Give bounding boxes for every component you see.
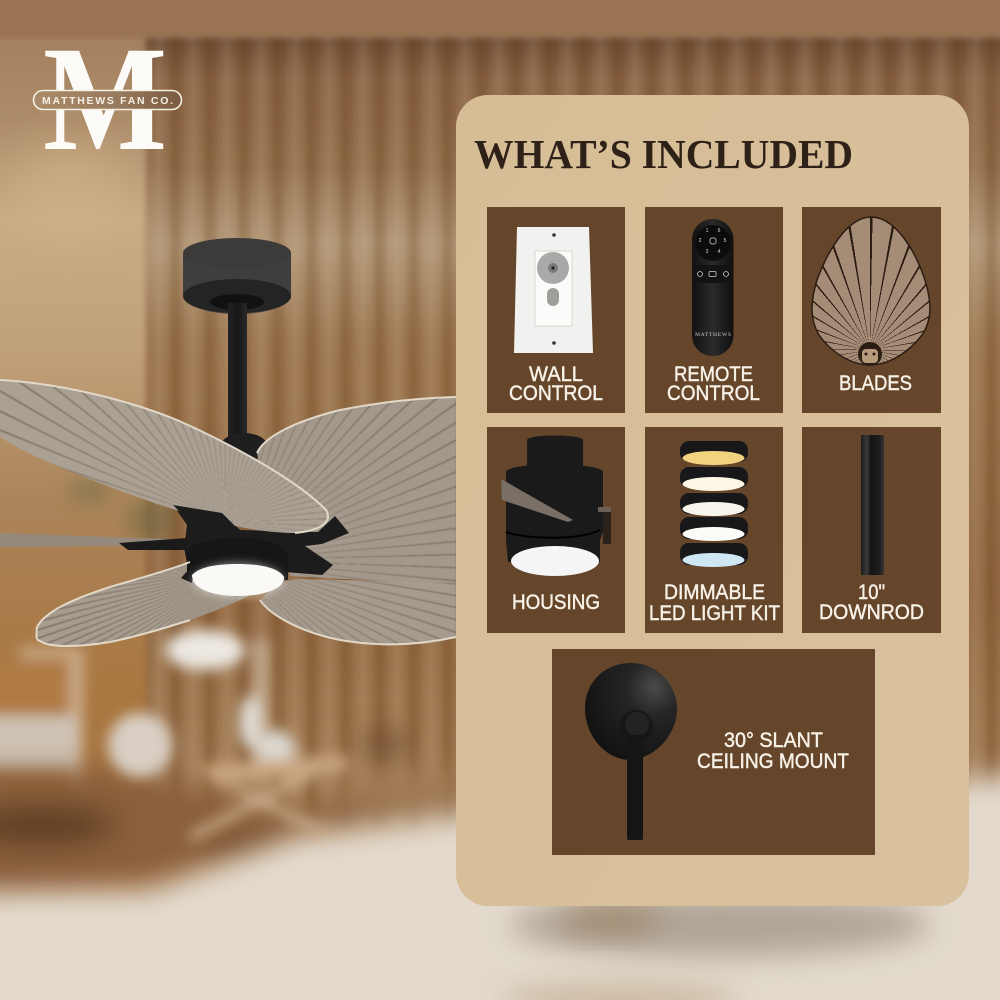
fan blade: upper right [255, 396, 456, 591]
icon: wall control [514, 227, 593, 353]
card: remote control: CONTROL [667, 382, 760, 405]
icon: remote control: 2 [699, 238, 702, 244]
card: 10 inch downrod: DOWNROD [819, 601, 924, 624]
card: 30 degree slant ceiling mount: CEILING MOUNT [697, 750, 849, 773]
icon: remote control: 5 [724, 238, 727, 244]
card: housing: HOUSING [512, 591, 600, 614]
icon: remote control: 3 [706, 249, 709, 255]
card: dimmable LED light kit: LED LIGHT KIT [649, 602, 780, 625]
card: housing [487, 427, 625, 633]
icon: remote control: 6 [718, 228, 721, 234]
fan blade: front upper left [0, 378, 332, 536]
heading: WHAT’S INCLUDED [474, 131, 853, 177]
card: remote control: REMOTE [674, 363, 753, 386]
logo: Matthews Fan Co.: MATTHEWS FAN CO. [42, 95, 173, 107]
icon: slant ceiling mount [585, 663, 677, 840]
card: dimmable LED light kit [645, 427, 783, 633]
card: 30 degree slant ceiling mount [552, 649, 875, 855]
card: blades: BLADES [839, 372, 912, 395]
card: remote control [645, 207, 783, 413]
icon: downrod [861, 435, 884, 575]
icon: remote control: 1 [706, 228, 709, 234]
card: wall control: WALL [529, 363, 583, 386]
icon: remote control: MATTHEWS [695, 332, 731, 338]
fan blade: lower left [38, 564, 250, 645]
icon: remote control [692, 219, 734, 356]
card: wall control: CONTROL [509, 382, 603, 405]
card: 10 inch downrod: 10" [858, 581, 885, 604]
card: dimmable LED light kit: DIMMABLE [664, 581, 765, 604]
icon: housing [501, 436, 611, 576]
blurred rug [0, 731, 470, 905]
card: wall control [487, 207, 625, 413]
fan blade: lower right [260, 579, 456, 644]
icon: blade [810, 215, 934, 368]
panel: what's included [456, 95, 969, 906]
blurred plant [70, 479, 172, 540]
card: 10 inch downrod [802, 427, 941, 633]
icon: remote control: 4 [718, 249, 721, 255]
blurred floor [0, 770, 1000, 1000]
card: 30 degree slant ceiling mount: 30° SLANT [724, 729, 823, 752]
icon: LED color stack [680, 441, 748, 567]
blurred armchair [0, 648, 83, 820]
blurred lamp and side table [108, 630, 350, 838]
fan blade: far left [0, 533, 171, 547]
card: blades [802, 207, 941, 413]
